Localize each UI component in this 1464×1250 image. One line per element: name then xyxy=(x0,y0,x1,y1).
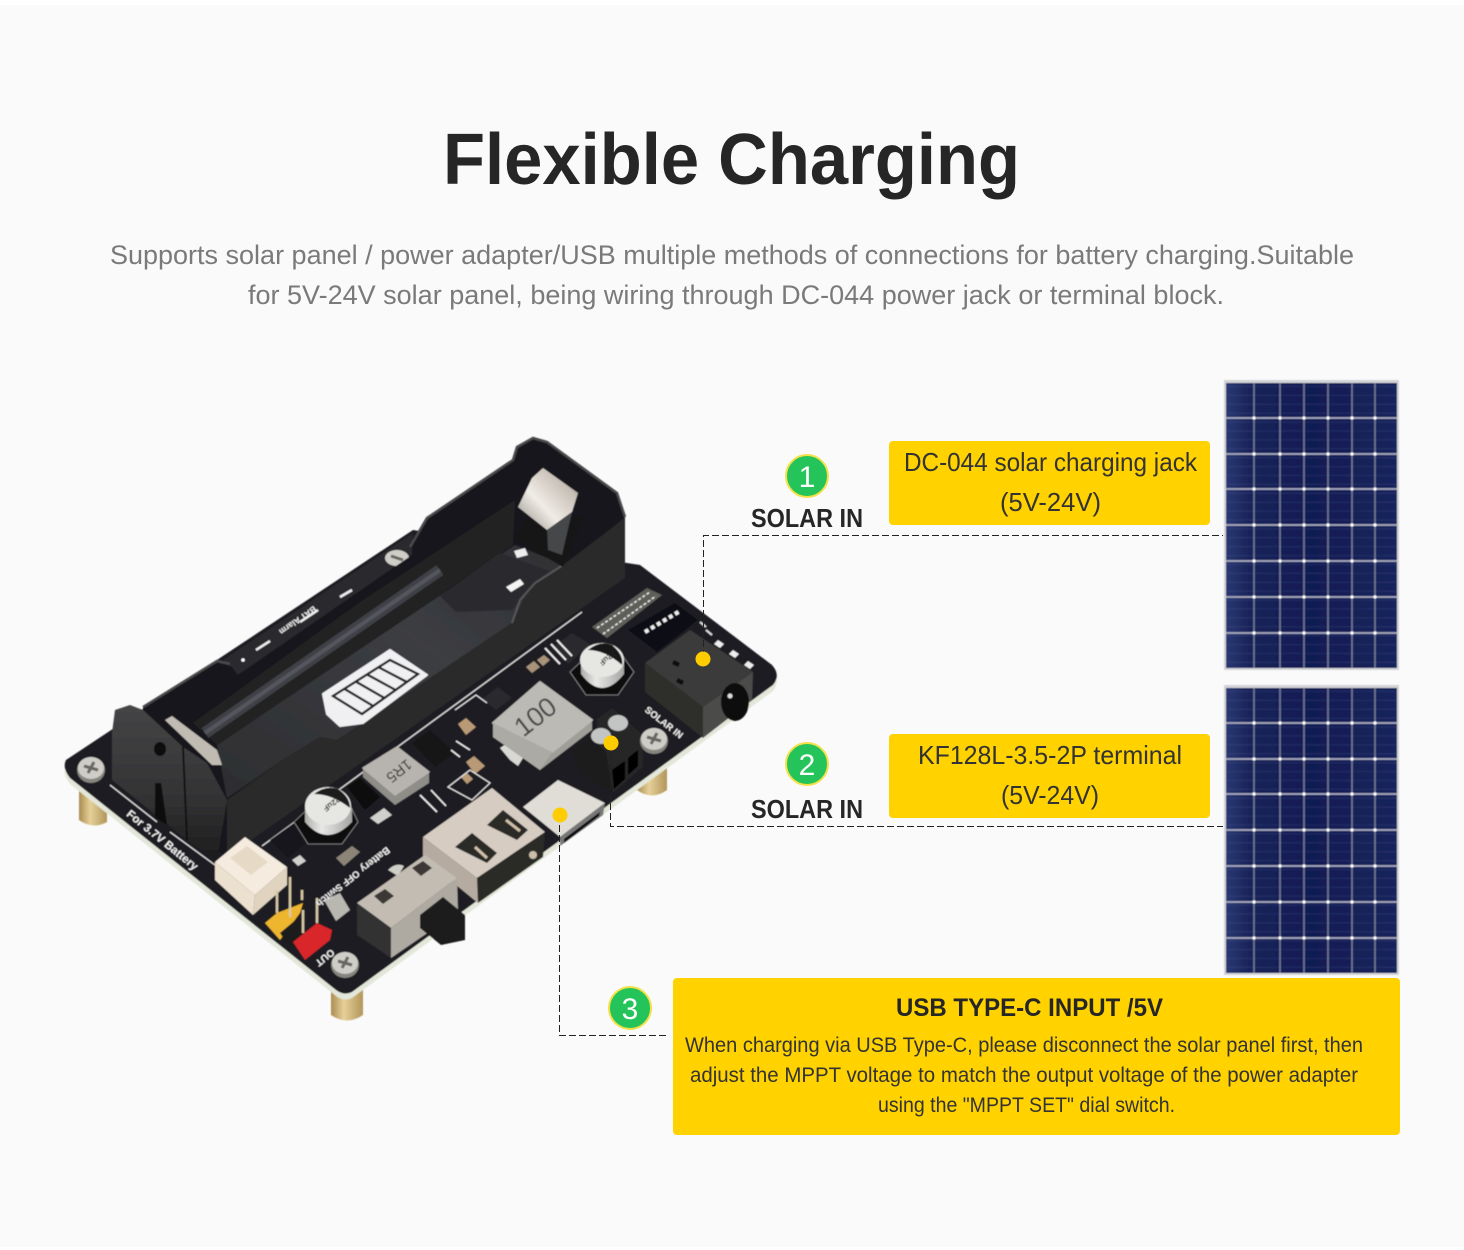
inductor 1R5: 1R5 xyxy=(383,755,415,786)
solar in label 2: SOLAR IN xyxy=(751,794,863,824)
callout: USB Type-C input xyxy=(673,978,1400,1135)
subtitle text block: Supports solar panel / power adapter/USB multiple methods of connections for battery charging.Suitable xyxy=(110,240,1354,270)
inductor 100: 100 xyxy=(508,691,562,743)
callout: DC-044 jack xyxy=(889,441,1210,525)
badge 3 xyxy=(609,987,651,1029)
circuit board photo illustration xyxy=(65,438,777,1020)
callout: USB Type-C input: using the "MPPT SET" dial switch. xyxy=(878,1093,1175,1117)
PCB base xyxy=(65,530,777,1000)
solar in label 1: SOLAR IN xyxy=(751,503,863,533)
yellow and red jumpers xyxy=(265,877,332,960)
slide switch xyxy=(357,855,465,958)
callout: USB Type-C input: When charging via USB Type-C, please disconnect the solar panel first, then xyxy=(685,1033,1363,1057)
capacitor left: 22uF xyxy=(321,795,342,813)
brass standoffs xyxy=(79,765,667,1020)
capacitor top right xyxy=(570,643,634,695)
battery spring clip xyxy=(506,468,583,592)
solar panel 2 xyxy=(1224,685,1399,975)
subtitle text block xyxy=(110,240,1354,310)
callout: DC-044 jack: DC-044 solar charging jack xyxy=(904,447,1198,477)
silkscreen labels xyxy=(124,705,685,968)
callout: USB Type-C input: USB TYPE-C INPUT /5V xyxy=(896,994,1163,1022)
solar panel 1 xyxy=(1224,380,1399,670)
callout: DC-044 jack: (5V-24V) xyxy=(1000,487,1101,517)
marker dot on USB-C port xyxy=(552,808,568,822)
badge 1: 1 xyxy=(799,461,815,494)
title: Flexible Charging xyxy=(443,120,1020,200)
marker dot on terminal block xyxy=(604,736,618,750)
silkscreen labels: OUT xyxy=(313,946,336,968)
dip switch and silkscreen block xyxy=(592,588,754,669)
subtitle text block: for 5V-24V solar panel, being wiring through DC-044 power jack or terminal block. xyxy=(248,280,1224,310)
callout: KF128L terminal: KF128L-3.5-2P terminal xyxy=(918,740,1182,770)
capacitor top right: 22uF xyxy=(597,649,618,667)
silkscreen labels: Battery xyxy=(357,844,392,874)
terminal block xyxy=(572,708,643,793)
silkscreen lines around holder xyxy=(110,612,582,865)
silkscreen labels: For 3.7V Battery xyxy=(124,808,200,873)
callout: KF128L terminal xyxy=(889,734,1210,818)
board screws xyxy=(77,728,668,978)
silkscreen labels: OFF Switch xyxy=(313,868,362,909)
badge 1 xyxy=(786,455,828,497)
inductor 100 xyxy=(493,682,592,770)
marker dot on DC jack xyxy=(696,652,710,666)
callout: KF128L terminal: (5V-24V) xyxy=(1001,780,1099,810)
rear PCB strip with BAT Alarm xyxy=(223,533,413,675)
dashed connector 3 xyxy=(560,815,668,1036)
DC jack xyxy=(645,630,753,738)
white battery connector xyxy=(215,837,287,915)
SMD parts and ICs xyxy=(270,633,590,921)
USB-A port xyxy=(423,788,545,903)
dashed connector 1 xyxy=(704,536,1223,657)
callout: USB Type-C input: adjust the MPPT voltage to match the output voltage of the power adapter xyxy=(690,1063,1358,1087)
badge 2: 2 xyxy=(799,749,815,782)
battery level icon xyxy=(323,650,427,726)
rear PCB strip with BAT Alarm: BAT Alarm xyxy=(277,604,318,637)
badge 3: 3 xyxy=(622,993,638,1026)
dashed connector 2 xyxy=(610,743,1223,826)
silkscreen labels: SOLAR IN xyxy=(642,705,685,741)
badge 2 xyxy=(786,743,828,785)
USB Type-C port xyxy=(523,780,605,846)
battery holder xyxy=(112,438,625,860)
inductor 1R5 xyxy=(363,747,429,805)
capacitor left xyxy=(294,787,358,844)
